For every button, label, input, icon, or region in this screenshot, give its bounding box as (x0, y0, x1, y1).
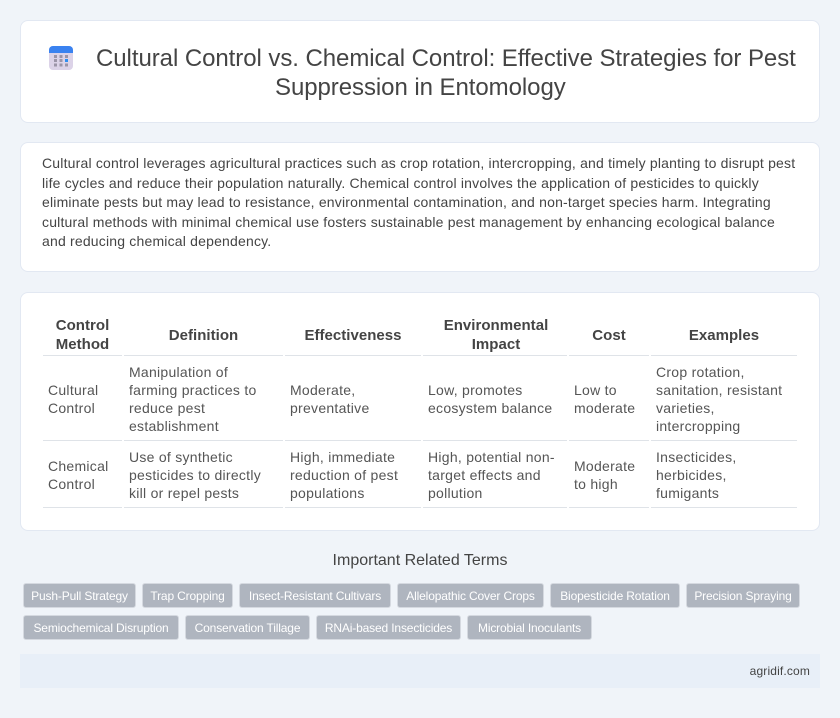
title (96, 45, 796, 101)
intro text: eliminate pests but may lead to resistance, environmental contamination, and non-target species harm. Integrating (42, 194, 771, 210)
table row: chemical control: kill or repel pests (129, 485, 239, 501)
table row: chemical control (48, 449, 737, 501)
footer source text: agridif.com (750, 664, 810, 678)
table header: Cost (592, 327, 626, 344)
table row: cultural control: varieties, (656, 400, 715, 416)
table row: chemical control: High, potential non- (428, 449, 555, 465)
table row: cultural control: sanitation, resistant (656, 382, 782, 398)
table row: cultural control: moderate (574, 400, 635, 416)
table row: chemical control: reduction of pest (290, 467, 398, 483)
table row: cultural control: ecosystem balance (428, 400, 552, 416)
table row: cultural control: establishment (129, 418, 219, 434)
table header: Impact (472, 336, 520, 353)
table header: Effectiveness (304, 327, 402, 344)
intro text: and reducing chemical dependency. (42, 233, 271, 249)
table row: cultural control: Control (48, 400, 95, 416)
table row: chemical control: Control (48, 476, 95, 492)
table row: chemical control: fumigants (656, 485, 719, 501)
related terms tags: Conservation Tillage (195, 621, 300, 635)
table header: Method (56, 336, 109, 353)
table row: cultural control: Low, promotes (428, 382, 523, 398)
related terms tags: Push-Pull Strategy (31, 589, 128, 603)
table row: chemical control: populations (290, 485, 365, 501)
table row: chemical control: Chemical (48, 458, 109, 474)
heading: important related terms: Important Related Terms (333, 552, 507, 569)
table row: cultural control: preventative (290, 400, 370, 416)
table header: Definition (169, 327, 238, 344)
related terms tags: Semiochemical Disruption (33, 621, 169, 635)
table header: Environmental (444, 317, 548, 334)
related terms tags (23, 583, 800, 640)
table header: Examples (689, 327, 759, 344)
table row: chemical control: to high (574, 476, 618, 492)
title: Cultural Control vs. Chemical Control: Effective Strategies for Pest (96, 45, 796, 72)
table row: chemical control: Use of synthetic (129, 449, 233, 465)
table row: chemical control: Insecticides, (656, 449, 737, 465)
related terms tags: Biopesticide Rotation (560, 589, 670, 603)
related terms tags: Trap Cropping (150, 589, 225, 603)
table row: cultural control: farming practices to (129, 382, 257, 398)
related terms tags: Allelopathic Cover Crops (406, 589, 535, 603)
table row: cultural control: reduce pest (129, 400, 205, 416)
related terms tags: Precision Spraying (694, 589, 792, 603)
table row: chemical control: Moderate (574, 458, 635, 474)
table row: chemical control: herbicides, (656, 467, 727, 483)
footer bar (20, 654, 820, 688)
intro text: Cultural control leverages agricultural practices such as crop rotation, intercropping, and timely planting to disrupt pest (42, 155, 795, 171)
comparison table (43, 317, 797, 508)
table row: cultural control (48, 364, 782, 434)
table row: cultural control: intercropping (656, 418, 740, 434)
intro text (42, 155, 796, 249)
related terms tags: RNAi-based Insecticides (325, 621, 452, 635)
related terms tags: Insect-Resistant Cultivars (249, 589, 381, 603)
table row: chemical control: target effects and (428, 467, 541, 483)
table row: cultural control: Manipulation of (129, 364, 228, 380)
related terms tags: Microbial Inoculants (478, 621, 581, 635)
table row: cultural control: Cultural (48, 382, 98, 398)
table row: chemical control: pollution (428, 485, 483, 501)
table row: chemical control: High, immediate (290, 449, 395, 465)
table row: cultural control: Moderate, (290, 382, 355, 398)
table row: cultural control: Crop rotation, (656, 364, 745, 380)
title: Suppression in Entomology (275, 74, 566, 101)
table header (56, 317, 759, 353)
intro text: cultural methods with minimal chemical use fosters sustainable pest management by enhancing ecological balance (42, 214, 775, 230)
panel: title card (20, 20, 820, 123)
panel: intro card (20, 142, 820, 272)
table row: chemical control: pesticides to directly (129, 467, 261, 483)
table row: cultural control: Low to (574, 382, 617, 398)
table header: Control (56, 317, 109, 334)
panel: comparison table card (20, 292, 820, 531)
intro text: life cycles and reduce their population naturally. Chemical control involves the application of pesticides to quickly (42, 174, 759, 190)
icon: calendar (49, 46, 73, 70)
